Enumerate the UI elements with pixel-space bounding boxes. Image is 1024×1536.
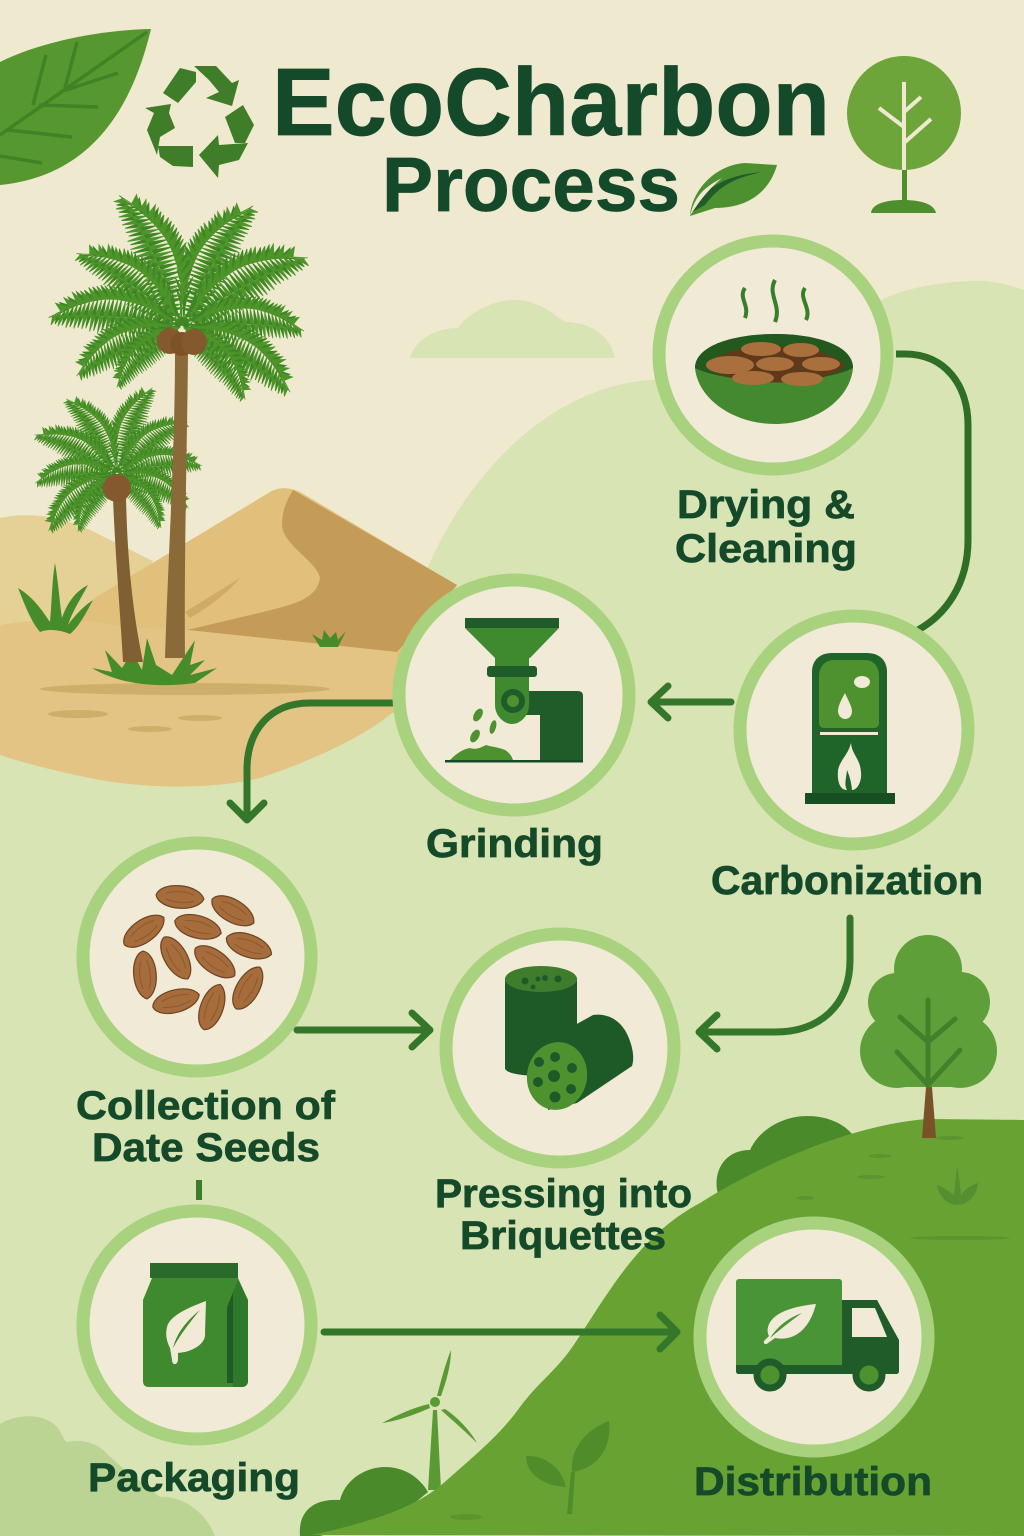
icon: date seeds xyxy=(118,884,275,1033)
title: Process xyxy=(382,142,680,228)
icon: recycle xyxy=(145,66,254,178)
wind turbine xyxy=(382,1350,477,1490)
icon: truck xyxy=(736,1279,842,1369)
sprout xyxy=(526,1421,609,1514)
grass tufts xyxy=(18,563,346,685)
panel: collection of date seeds: Date Seeds xyxy=(92,1126,320,1170)
label: Carbonization xyxy=(711,859,983,903)
title xyxy=(272,49,830,228)
dark green hill xyxy=(312,1119,1024,1536)
icon: tree circle xyxy=(847,56,961,213)
label: Distribution xyxy=(694,1460,932,1504)
hill grass marks xyxy=(450,1136,1010,1520)
label: Collection of xyxy=(76,1084,336,1128)
panel: grinding xyxy=(399,580,629,866)
connector tick xyxy=(196,1180,202,1200)
arrow: seeds to briquettes xyxy=(297,1013,430,1047)
icon: title leaf xyxy=(690,163,777,216)
arrow: carbonization to briquettes xyxy=(699,918,850,1049)
foreground mound xyxy=(300,1467,428,1536)
panel: drying and cleaning xyxy=(659,241,887,571)
small hill plant xyxy=(937,1166,978,1205)
panel: packaging xyxy=(83,1211,311,1500)
cloud xyxy=(410,300,615,358)
icon: steam xyxy=(743,280,808,322)
label: Drying & xyxy=(677,483,855,527)
label: Packaging xyxy=(88,1456,300,1500)
panel: collection of date seeds xyxy=(76,843,336,1170)
icon: furnace xyxy=(812,653,887,793)
icon: bowl xyxy=(695,334,853,424)
bush behind hill xyxy=(717,1116,852,1200)
arrow: carbonization to grinding xyxy=(651,686,731,718)
bottom left bush xyxy=(0,1416,215,1536)
arrow: packaging to distribution xyxy=(324,1315,677,1349)
panel: pressing into briquettes xyxy=(435,934,692,1258)
panel: drying and cleaning: Cleaning xyxy=(675,527,857,571)
label: Pressing into xyxy=(435,1172,692,1216)
connector: drying to carbonization xyxy=(896,354,968,630)
panel: distribution xyxy=(694,1223,932,1504)
panel: carbonization xyxy=(711,616,983,903)
label: Grinding xyxy=(426,822,603,866)
palm trees xyxy=(31,178,315,662)
top left leaf xyxy=(0,29,151,185)
icon: bag xyxy=(143,1278,248,1387)
icon: grinder xyxy=(525,691,583,761)
panel: pressing into briquettes: Briquettes xyxy=(460,1214,666,1258)
right tree xyxy=(860,935,997,1138)
icon: briquettes xyxy=(505,978,577,1076)
title: EcoCharbon xyxy=(272,49,830,156)
arrow: grinding to seeds xyxy=(230,703,392,820)
desert dunes xyxy=(0,488,457,787)
